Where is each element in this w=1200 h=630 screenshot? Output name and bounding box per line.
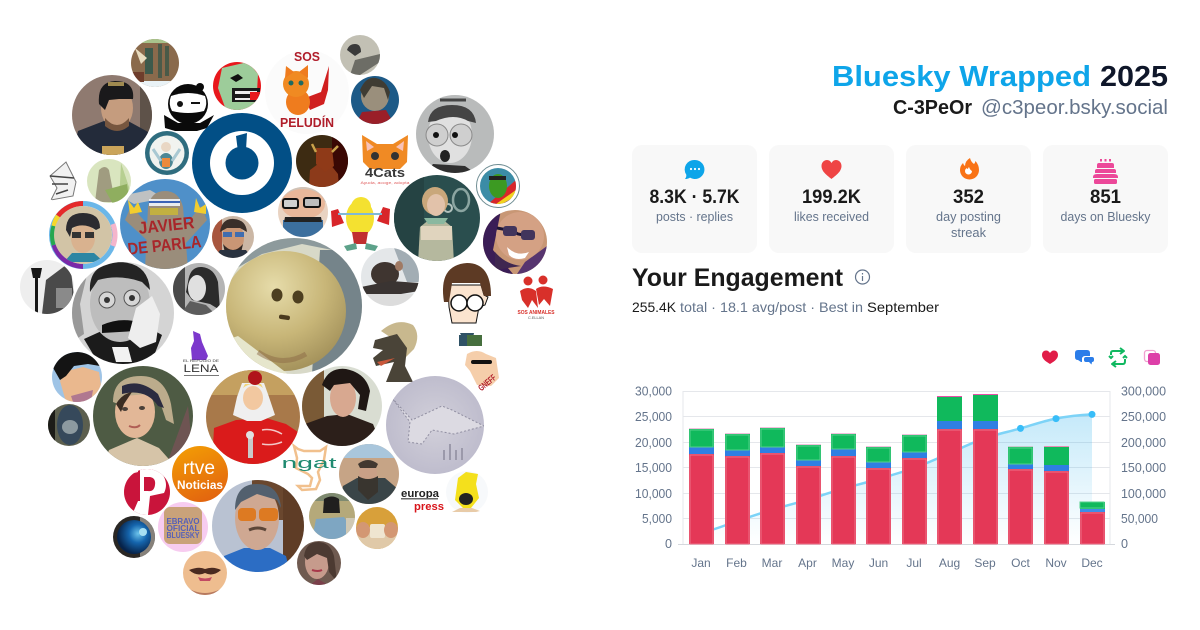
avatar: El Refugio de Lena logo: EL REFUGIO DE [183,358,219,363]
icon: info [856,270,870,284]
avatar: ngat logo: ngat [282,455,338,472]
avatar: cartoon hero [52,352,102,402]
avatar: Gneff bald character [465,351,499,393]
icon: quotes squares legend [1144,350,1160,365]
avatar: Javier de Parla mummy: JAVIER [138,213,195,238]
avatar: street lamp photo [20,260,76,314]
icon: reposts arrows legend [1109,348,1127,367]
avatar: woman black and white [173,263,225,315]
avatar: man in black cap [72,75,154,155]
month labels: Oct [1011,556,1030,570]
avatar: dark tattoo photo [48,404,90,446]
stat card: days on Bluesky: 851 [1090,187,1121,208]
month labels: May [832,556,854,570]
right axis labels: 150,000 [1121,461,1166,475]
stat card: day posting streak [906,145,1031,253]
avatar: moustache [183,551,227,595]
avatar: SOS animales logo: C.ELLAN [528,315,544,320]
chart legend [1042,348,1160,367]
avatar: marmot illustration [87,159,131,204]
avatar: egg face [222,238,362,374]
stacked bars [689,394,1105,544]
avatar: blue orb [113,516,155,558]
month labels: Aug [939,556,960,570]
avatar: cartoon man with glasses [443,263,491,346]
right axis labels: 200,000 [1121,436,1166,450]
left axis labels: 25,000 [635,410,672,424]
avatar: rtve Noticias: rtve [183,458,215,479]
avatar: red P logo [124,469,170,515]
avatar: pencil sketch [49,161,76,200]
left axis labels: 20,000 [635,436,672,450]
stat card: days on Bluesky: days on Bluesky [1060,209,1151,224]
avatar: ngat logo [282,446,338,490]
engagement summary [632,299,939,315]
avatar: man with glasses and comic [278,187,328,237]
left axis labels: 10,000 [635,487,672,501]
month labels: Jun [869,556,888,570]
title: Bluesky Wrapped [832,61,1091,93]
avatar: rtve Noticias: Noticias [177,478,223,492]
user name and handle [893,97,1168,119]
avatar: girl blowing smoke rings [394,175,480,263]
bar: Nov [1044,446,1069,544]
cumulative line [701,411,1096,532]
bar: Mar [760,427,785,544]
avatar: 4Cats logo: Ayuda, acoge, adopta [360,180,410,185]
avatar: 4Cats logo [360,135,410,185]
month labels: Jan [691,556,711,570]
section heading: Your Engagement: Your Engagement [632,264,844,292]
avatar: child on blue [351,76,399,124]
avatar: Darth Vader helmet person [309,493,355,539]
avatar: cartoon with rainbow ring [52,204,115,266]
avatar: green dinosaur in ring [476,164,520,208]
stat card: day posting streak: 352 [953,187,984,208]
right axis labels: 300,000 [1121,384,1166,398]
avatar: man with blue sunglasses [212,216,254,258]
avatar: blue ring logo [192,113,292,213]
stat card: posts and replies: 8.3K · 5.7K [650,187,740,208]
bar: Oct [1008,446,1033,544]
left axis labels: 30,000 [635,384,672,398]
avatar: hands with cup [356,507,398,549]
avatar: raptor with wool hat [373,322,417,382]
avatar: Gneff bald character: GNEFF [476,372,498,393]
right axis labels: 0 [1121,537,1128,551]
avatar: goggles boy [416,95,494,173]
title: 2025 [1100,61,1168,93]
cumulative area [701,414,1092,544]
avatar: yellow bird [331,197,390,251]
right axis labels: 250,000 [1121,410,1166,424]
left axis labels: 0 [665,537,672,551]
stat card: day posting streak: day posting [936,209,1001,224]
stat card: likes received: likes received [794,209,869,224]
month labels [691,556,1103,570]
user name and handle: @c3peor.bsky.social [981,97,1168,119]
avatar: SOS Peludin: SOS [294,49,320,64]
avatar: bearded man [339,444,399,504]
stat card: days on Bluesky [1043,145,1168,253]
user name and handle: C-3PeOr [893,97,972,119]
avatar: Ebravo Oficial Bluesky [158,502,208,552]
stat card: posts and replies [632,145,757,253]
month labels: Feb [726,556,747,570]
bar: Aug [937,396,962,544]
engagement summary: total · 18.1 avg/post · Best in [680,299,863,315]
right axis labels: 50,000 [1121,512,1158,526]
avatar: El Refugio de Lena logo [183,331,219,376]
bar: May [831,433,856,544]
avatar: round badge [145,131,189,175]
right axis labels: 100,000 [1121,487,1166,501]
stat card: posts and replies: posts · replies [656,209,733,224]
avatar: painted woman [297,541,341,585]
icon: flame [960,158,979,180]
avatar: green pixel monster [213,62,261,110]
stat card: likes received [769,145,894,253]
grid lines [683,391,1110,544]
avatar: chimp [361,248,419,306]
avatar: screaming Homer [446,471,488,513]
right axis labels [1121,384,1166,551]
month labels: Mar [762,556,782,570]
avatar: smiling man with purple tint [483,210,547,274]
avatar: Ebravo Oficial Bluesky: BLUESKY [166,531,200,540]
avatar: Jane Austen portrait [93,366,194,466]
avatar: SOS animales logo: SOS ANIMALES [518,310,555,316]
bar: Jul [902,434,927,544]
avatar: man with orange sunglasses [212,480,304,572]
avatar: 4Cats logo: 4Cats [365,165,405,180]
engagement summary: September [867,299,939,315]
engagement summary: 255.4K [632,299,677,315]
bar: Feb [725,433,750,544]
avatar: small grey photo [340,35,380,75]
bar: Jun [866,446,891,544]
bar: Jan [689,428,714,544]
icon: cake [1093,159,1118,184]
avatar: Europa Press logo: press [414,501,444,513]
avatar cluster [20,35,555,595]
avatar: woman with dark curly hair [302,366,382,446]
bar: Sep [973,394,998,544]
month labels: Dec [1081,556,1103,570]
left axis labels: 15,000 [635,461,672,475]
avatar: SOS Peludin [265,49,349,134]
month labels: Jul [906,556,922,570]
avatar: El Refugio de Lena logo: LENA [184,363,219,375]
stat card: likes received: 199.2K [802,187,861,208]
icon: chat bubble [685,160,704,179]
avatar: SOS Peludin: PELUDÍN [280,115,334,130]
avatar: Europa Press logo: europa [401,488,440,500]
avatar: snowy owl drawing [386,376,484,474]
month labels: Apr [798,556,817,570]
stat card: day posting streak: streak [951,225,986,240]
engagement chart [635,384,1166,570]
avatar: ninja [164,83,214,131]
bar: Dec [1080,502,1105,544]
avatar: rtve Noticias [172,446,228,502]
avatar: Javier de Parla mummy: DE PARLA [127,232,202,259]
avatar: red traditional dress singer [206,370,300,464]
left axis labels [635,384,672,551]
avatar: illustrated tea bag [130,38,180,89]
left axis labels: 5,000 [642,512,672,526]
avatar: Javier de Parla mummy [120,179,210,269]
avatar: Groucho black and white [72,262,174,366]
avatar: Europa Press logo [401,488,444,513]
bar: Apr [796,444,821,544]
avatar: Ebravo Oficial Bluesky: EBRAVO [166,517,200,526]
month labels: Sep [974,556,996,570]
avatar: Ebravo Oficial Bluesky: OFICIAL [166,524,200,533]
avatar: SOS animales logo [518,276,555,320]
icon: heart [822,160,842,179]
avatar: devil figure [296,135,348,187]
icon: replies bubbles legend [1075,350,1094,364]
icon: likes heart legend [1042,350,1058,364]
month labels: Nov [1045,556,1067,570]
